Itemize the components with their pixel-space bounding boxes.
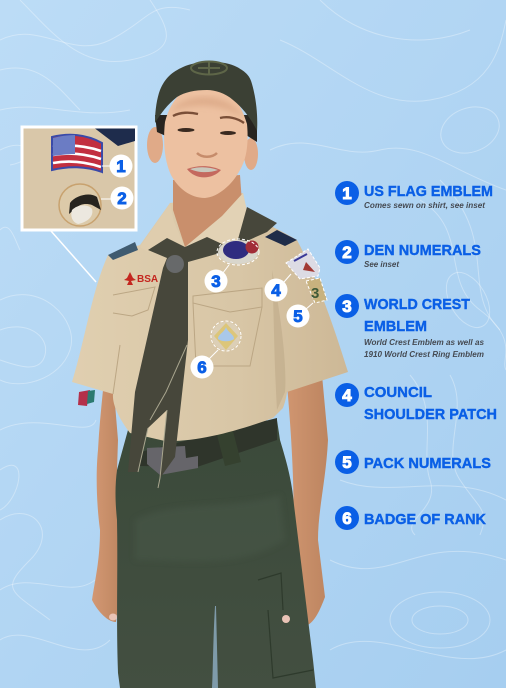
legend item 2: See inset (364, 260, 399, 269)
badge 3: 3 (211, 272, 221, 291)
legend item 6: 6 (342, 509, 352, 528)
neck (173, 175, 242, 247)
legend item 4: 4 (342, 386, 352, 405)
patch: council shoulder (286, 249, 320, 279)
left collar (140, 203, 185, 252)
cargo pocket (258, 573, 313, 678)
legend item 4: SHOULDER PATCH (364, 406, 497, 423)
BSA shirt logo (124, 272, 158, 285)
legend item 1 (335, 181, 493, 210)
pants shading (135, 495, 285, 562)
badge 6: 6 (197, 358, 207, 377)
legend item 3: WORLD CREST (364, 296, 470, 313)
legend item 6: BADGE OF RANK (364, 511, 486, 528)
legend item 2: 2 (342, 243, 352, 262)
neckerchief (128, 207, 277, 478)
legend item 3: EMBLEM (364, 318, 427, 335)
neckerchief edging (138, 345, 187, 488)
legend item 4: COUNCIL (364, 384, 432, 401)
legend item 1: 1 (342, 184, 352, 203)
eyes and brows (173, 113, 244, 135)
epaulets (108, 242, 138, 260)
left arm (92, 390, 122, 622)
legend item 5: PACK NUMERALS (364, 455, 491, 472)
boy figure (72, 61, 348, 688)
inset connectors (101, 166, 111, 199)
buckle (147, 446, 198, 475)
hair (155, 115, 257, 142)
neckerchief slide (166, 255, 184, 273)
legend item 3: 1910 World Crest Ring Emblem (364, 350, 484, 359)
inset flag (52, 135, 102, 172)
right collar (185, 193, 248, 250)
legend item 2 (335, 240, 481, 269)
shirt (72, 193, 348, 441)
legend item 3: World Crest Emblem as well as (364, 338, 485, 347)
legend item 3 (335, 294, 485, 359)
sleeve shading (272, 270, 285, 410)
badge 4: 4 (271, 281, 281, 300)
inset collar (95, 128, 135, 146)
belt (136, 418, 277, 467)
mouth (187, 166, 221, 177)
patch: world crest (217, 239, 259, 265)
patch: badge of rank (211, 321, 241, 351)
inset photo (22, 127, 136, 230)
hat (155, 62, 257, 131)
badge 5: 5 (293, 307, 303, 326)
legend item 5 (335, 450, 491, 474)
legend item 2: DEN NUMERALS (364, 242, 481, 259)
legend item 1: US FLAG EMBLEM (364, 183, 493, 200)
legend item 4 (335, 383, 497, 423)
legend item 3: 3 (342, 297, 352, 316)
ears (147, 127, 258, 170)
forehead shade (170, 97, 244, 118)
patch: pack numerals: 3 (311, 285, 319, 302)
right arm (280, 375, 328, 626)
badge 4 (264, 278, 288, 302)
badge 6 (190, 356, 214, 378)
hand nails (109, 614, 290, 623)
badge 5 (286, 304, 310, 328)
legend item 1: Comes sewn on shirt, see inset (364, 201, 485, 210)
inset badge 2: 2 (117, 189, 127, 208)
sleeve tassel (78, 390, 95, 406)
legend item 5: 5 (342, 453, 352, 472)
pocket details (113, 287, 262, 394)
gap between legs (212, 606, 218, 688)
face (164, 82, 248, 198)
BSA shirt logo: BSA (137, 274, 158, 285)
badge 3 (204, 270, 228, 292)
inset den emblem (59, 184, 101, 226)
legend item 6 (335, 506, 486, 530)
hat emblem (191, 61, 227, 75)
shorts (116, 420, 316, 688)
belt loop (217, 431, 241, 466)
inset badge 1: 1 (116, 157, 126, 176)
patch: pack numerals (306, 278, 327, 303)
connector lines (51, 231, 313, 366)
nose (197, 153, 217, 157)
